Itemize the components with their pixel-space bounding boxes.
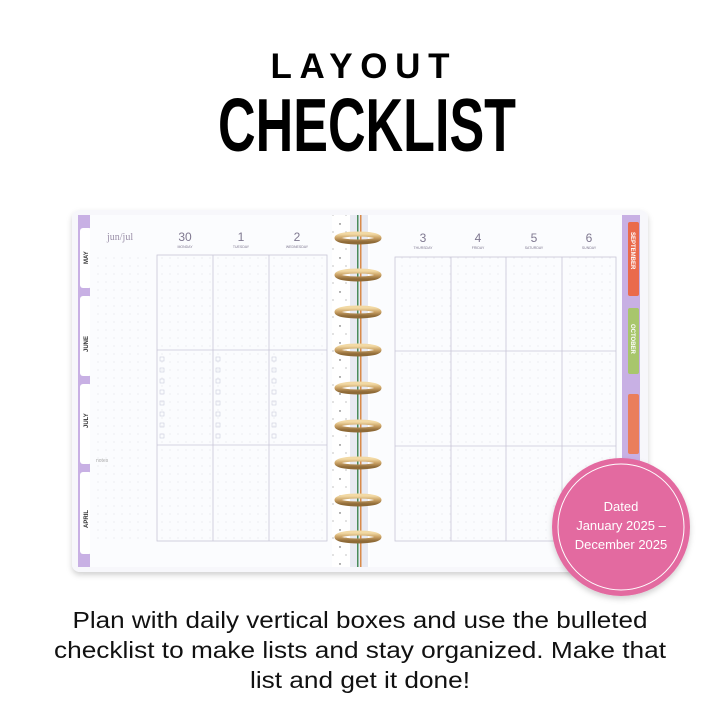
planner: TUESDAY	[233, 245, 250, 249]
badge: dated: January 2025 –	[576, 518, 667, 533]
description text: Plan with daily vertical boxes and use the bulleted	[72, 607, 648, 633]
planner	[72, 210, 648, 572]
left tabs: JULY	[84, 413, 90, 428]
planner: MONDAY	[177, 245, 193, 249]
badge: dated	[552, 458, 690, 596]
planner: notes	[96, 458, 109, 464]
left grid	[157, 255, 327, 541]
planner: THURSDAY	[414, 246, 433, 250]
planner: 30	[178, 230, 192, 244]
right grid	[395, 257, 616, 541]
planner: 1	[238, 230, 245, 244]
left tabs	[80, 228, 92, 554]
right tabs: SEPTEMBER	[629, 232, 635, 270]
badge: dated: Dated	[604, 499, 638, 514]
planner: FRIDAY	[472, 246, 485, 250]
left tabs: JUNE	[84, 336, 90, 352]
spine	[332, 215, 372, 567]
title: LAYOUT: LAYOUT	[270, 47, 450, 86]
planner: 5	[531, 231, 538, 245]
title: CHECKLIST: CHECKLIST	[218, 83, 516, 167]
planner: SATURDAY	[525, 246, 544, 250]
planner: 2	[294, 230, 301, 244]
badge: dated: December 2025	[575, 537, 667, 552]
right tabs: OCTOBER	[629, 324, 635, 355]
right tabs	[628, 222, 639, 454]
description text: checklist to make lists and stay organized. Make that	[54, 637, 667, 663]
planner: 3	[420, 231, 427, 245]
planner cover	[72, 210, 648, 572]
planner: SUNDAY	[582, 246, 597, 250]
description text	[54, 607, 667, 693]
description text: list and get it done!	[250, 667, 470, 693]
planner: WEDNESDAY	[286, 245, 309, 249]
left tabs: MAY	[84, 251, 90, 264]
binder rings	[337, 234, 379, 541]
planner: 6	[586, 231, 593, 245]
planner: jun/jul	[106, 232, 133, 243]
left tabs: APRIL	[84, 510, 90, 528]
left page	[90, 215, 352, 567]
planner: 4	[475, 231, 482, 245]
right checkboxes	[399, 358, 570, 439]
right page	[370, 215, 622, 567]
